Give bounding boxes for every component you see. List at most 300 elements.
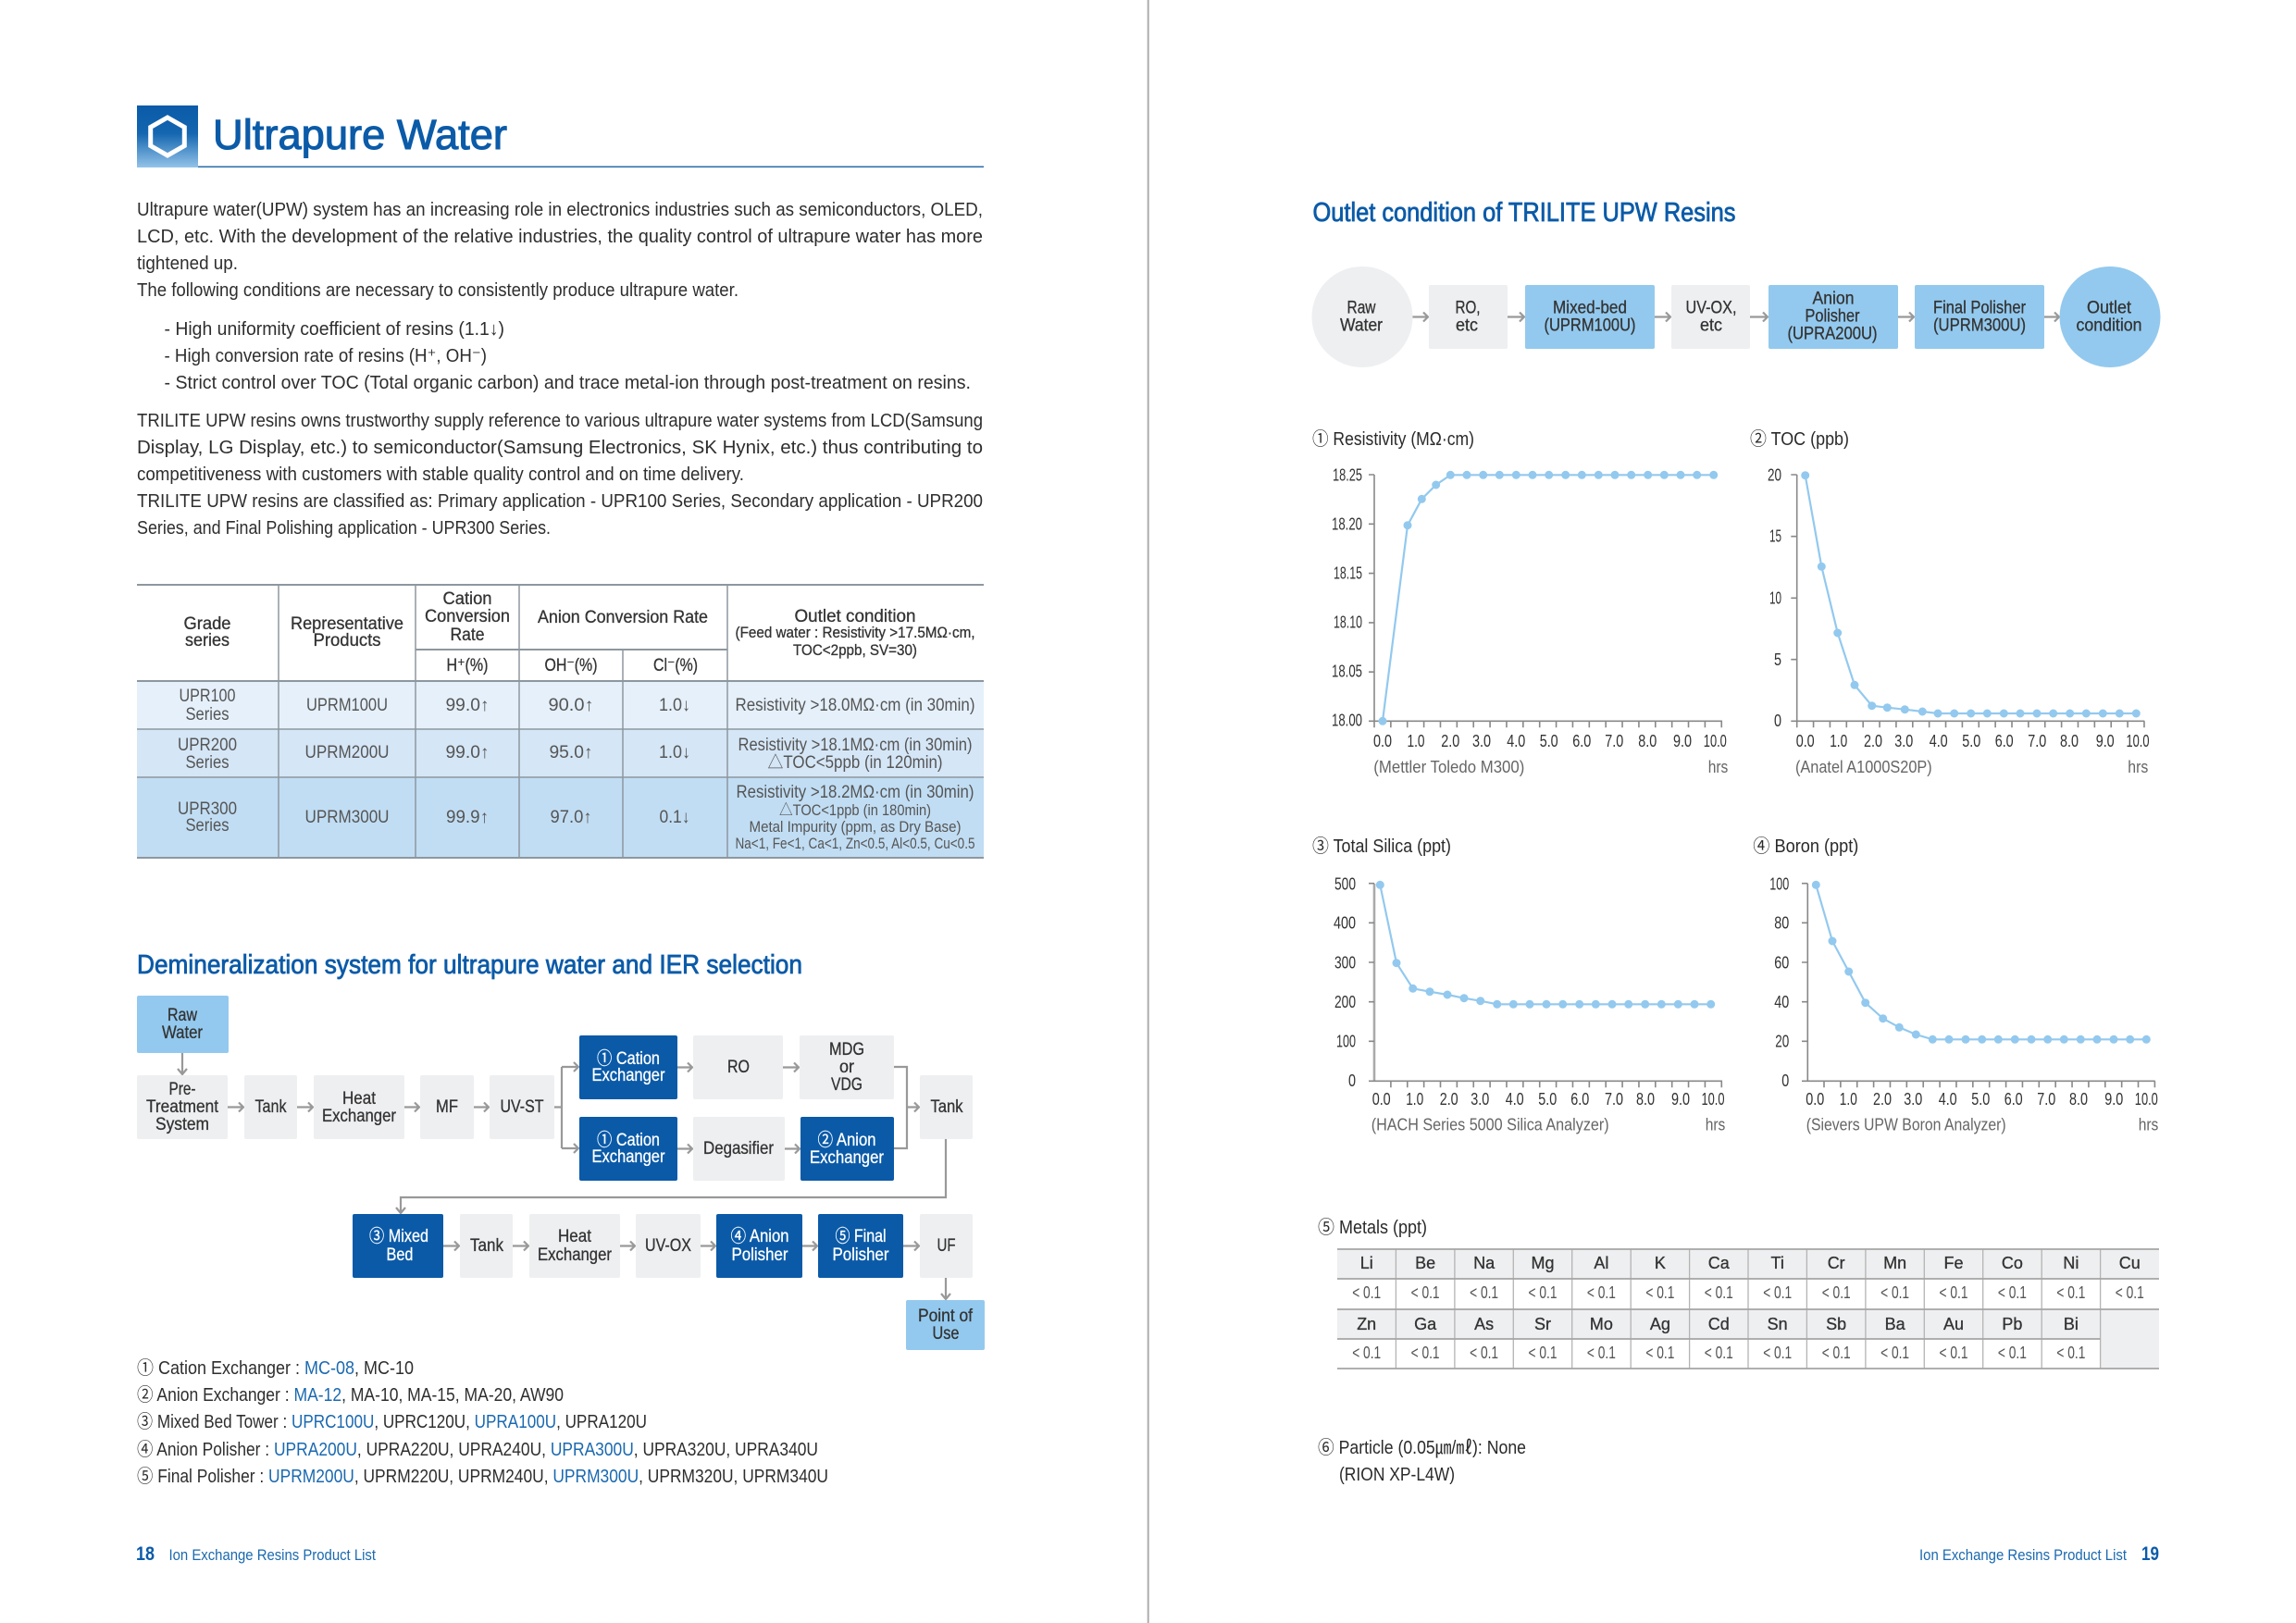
- node: final polisher: [1915, 285, 2044, 349]
- table row: UPR300: 0.1↓: [659, 808, 690, 827]
- x axis labels: [1373, 732, 1727, 750]
- x axis labels: 8.0: [1636, 1090, 1655, 1109]
- metals values 2: < 0.1: [1763, 1344, 1792, 1362]
- table header: Anion Conversion Rate: [538, 608, 708, 627]
- metals values 2: < 0.1: [1352, 1344, 1381, 1362]
- table row: UPR200: 95.0↑: [550, 743, 592, 762]
- box: anion exchanger: [800, 1117, 894, 1181]
- node: UV-OX etc: UV-OX,: [1686, 298, 1736, 318]
- metals values 1: < 0.1: [1940, 1283, 1967, 1302]
- metals values 2: < 0.1: [1529, 1344, 1557, 1362]
- text block: TRILITE description: Display, LG Display, etc.) to semiconductor(Samsung Electronics, SK Hynix, etc.) thus contributing to: [137, 438, 983, 458]
- y axis labels: [1768, 465, 1781, 730]
- x axis labels: 10.0: [1701, 1090, 1725, 1109]
- box: tank: [244, 1075, 297, 1139]
- y axis labels: 18.20: [1332, 515, 1362, 534]
- footer: right page: Ion Exchange Resins Product List: [1919, 1546, 2127, 1564]
- text block: introduction: tightened up.: [137, 254, 238, 274]
- instrument note: (Sievers UPW Boron Analyzer): [1806, 1116, 2006, 1134]
- box: MF: MF: [436, 1097, 458, 1117]
- legend: resin selection: ③ Mixed Bed Tower : UPRC100U, UPRC120U, UPRA100U, UPRA120U: [137, 1411, 647, 1432]
- metals values 2: < 0.1: [2056, 1344, 2085, 1362]
- box: mixed bed: Bed: [387, 1245, 413, 1265]
- node: anion polisher: (UPRA200U): [1788, 324, 1877, 344]
- metals values 1: < 0.1: [1763, 1283, 1792, 1302]
- unit: hrs: [2128, 758, 2148, 776]
- chart: total silica: [1312, 836, 1725, 1134]
- y axis labels: 500: [1334, 875, 1356, 894]
- metals row 1: Mg: [1531, 1254, 1555, 1272]
- metals values 2: < 0.1: [1705, 1344, 1733, 1362]
- box: heat exchanger row 3: Heat: [558, 1227, 592, 1246]
- flow diagram: demineralization system: [137, 996, 985, 1350]
- metals row 1: Li: [1360, 1254, 1373, 1272]
- box: MF: [420, 1075, 474, 1139]
- y axis labels: 18.00: [1332, 711, 1362, 729]
- box: tank right: Tank: [931, 1097, 963, 1117]
- x axis labels: 7.0: [2028, 732, 2046, 750]
- x axis labels: 0.0: [1806, 1090, 1824, 1109]
- node: RO etc: [1429, 285, 1508, 349]
- node: UV-OX etc: etc: [1700, 316, 1722, 335]
- x axis labels: 10.0: [2127, 732, 2149, 750]
- y axis labels: 5: [1774, 650, 1781, 669]
- metals row 2: [1357, 1315, 2079, 1333]
- chart title: ③ Total Silica (ppt): [1312, 836, 1451, 857]
- metals values 1: < 0.1: [1822, 1283, 1851, 1302]
- table row: UPR300: 99.9↑: [446, 808, 489, 827]
- box: mixed bed: [353, 1214, 443, 1278]
- footer: right page: 19: [2141, 1543, 2159, 1565]
- node: raw water: [1312, 266, 1412, 367]
- table row: UPR300: △TOC<1ppb (in 180min): [779, 801, 931, 819]
- metals row 1: Fe: [1943, 1254, 1964, 1272]
- text block: TRILITE description: TRILITE UPW resins are classified as: Primary application - UPR100 Series, Secondary application - UPR200: [137, 491, 983, 512]
- box: heat exchanger row 3: Exchanger: [538, 1245, 613, 1265]
- chart: boron: [1753, 836, 2158, 1134]
- box: anion polisher: ④ Anion: [731, 1226, 788, 1246]
- table row: UPR100: UPRM100U: [306, 696, 388, 715]
- metals row 2: Mo: [1590, 1315, 1613, 1333]
- box: point of use: Point of: [918, 1307, 974, 1326]
- table row: UPR300: [178, 783, 975, 852]
- y axis labels: 300: [1334, 954, 1356, 973]
- table header: (Feed water : Resistivity >17.5MΩ·cm,: [735, 624, 975, 641]
- data series: [1380, 885, 1711, 1004]
- unit: hrs: [2139, 1116, 2158, 1134]
- box: degasifier: Degasifier: [703, 1139, 775, 1158]
- table row: UPR300: Na<1, Fe<1, Ca<1, Zn<0.5, Al<0.5, Cu<0.5: [735, 835, 975, 852]
- table header: Conversion: [425, 607, 510, 626]
- node: anion polisher: Anion: [1812, 289, 1855, 309]
- table header: H⁺(%): [446, 656, 489, 675]
- text block: particle: (RION XP-L4W): [1339, 1465, 1455, 1485]
- table row: UPR300: UPR300: [178, 799, 237, 819]
- table header: Rate: [450, 626, 485, 645]
- chart title: ① Resistivity (MΩ·cm): [1312, 428, 1474, 450]
- x axis labels: 5.0: [1540, 732, 1558, 750]
- box: anion polisher: Polisher: [731, 1245, 788, 1265]
- metals row 1: Mn: [1883, 1254, 1906, 1272]
- table header: Grade: [183, 614, 231, 634]
- text block: introduction: The following conditions are necessary to consistently produce ultrapure water.: [137, 280, 738, 301]
- legend: resin selection: [137, 1357, 828, 1487]
- y axis labels: [1334, 875, 1356, 1090]
- box: pre-treatment system: System: [155, 1115, 209, 1134]
- data series: [1806, 476, 2136, 713]
- metals row 1: K: [1655, 1254, 1666, 1272]
- box: cation exchanger upper: ① Cation: [597, 1048, 660, 1069]
- box: cation exchanger upper: Exchanger: [592, 1066, 665, 1085]
- heading: demineralization: Demineralization system for ultrapure water and IER selection: [137, 950, 802, 980]
- unit: hrs: [1706, 1116, 1725, 1134]
- x axis labels: 1.0: [1830, 732, 1847, 750]
- box: anion polisher: [716, 1214, 802, 1278]
- x axis labels: 8.0: [2060, 732, 2079, 750]
- metals values 2: < 0.1: [1880, 1344, 1909, 1362]
- table header: Representative: [291, 614, 403, 634]
- box: final polisher: ⑤ Final: [835, 1226, 887, 1246]
- metals row 1: Ca: [1708, 1254, 1731, 1272]
- node: final polisher: (UPRM300U): [1933, 316, 2026, 335]
- x axis labels: 8.0: [2069, 1090, 2088, 1109]
- box: mixed bed: ③ Mixed: [369, 1226, 428, 1246]
- x axis labels: 7.0: [1605, 732, 1623, 750]
- box: MDG or VDG: MDG: [829, 1040, 864, 1059]
- title: Ultrapure Water: [213, 111, 507, 158]
- table row: UPR200: △TOC<5ppb (in 120min): [768, 752, 942, 773]
- instrument note: (HACH Series 5000 Silica Analyzer): [1371, 1116, 1609, 1134]
- metals row 1: Na: [1473, 1254, 1496, 1272]
- y axis labels: 18.05: [1332, 663, 1362, 681]
- box: final polisher: Polisher: [833, 1245, 889, 1265]
- x axis labels: 3.0: [1472, 732, 1491, 750]
- y axis labels: 20: [1768, 465, 1781, 484]
- node: mixed-bed: (UPRM100U): [1544, 316, 1636, 335]
- box: UF: [920, 1214, 973, 1278]
- metals values 2: < 0.1: [1645, 1344, 1674, 1362]
- text block: conditions list: - High conversion rate of resins (H⁺, OH⁻): [165, 346, 487, 366]
- footer: left page: Ion Exchange Resins Product List: [168, 1546, 376, 1564]
- metals values 2: < 0.1: [1822, 1344, 1851, 1362]
- text block: particle: ⑥ Particle (0.05㎛/㎖): None: [1318, 1437, 1526, 1458]
- box: heat exchanger: Exchanger: [322, 1107, 397, 1126]
- text block: TRILITE description: Series, and Final Polishing application - UPR300 Series.: [137, 518, 551, 539]
- x axis labels: 6.0: [2004, 1090, 2023, 1109]
- metals values 2: [1352, 1344, 2085, 1362]
- x axis labels: 4.0: [1939, 1090, 1957, 1109]
- metals row 2: Zn: [1357, 1315, 1376, 1333]
- metals values 1: < 0.1: [1470, 1283, 1498, 1302]
- metals row 2: Ag: [1650, 1315, 1670, 1333]
- table header: Outlet condition: [794, 607, 916, 626]
- box: tank row 3: [460, 1214, 513, 1278]
- table row: UPR200: UPRM200U: [305, 743, 389, 762]
- metals row 2: Sn: [1768, 1315, 1788, 1333]
- box: point of use: Use: [933, 1324, 959, 1344]
- text block: introduction: [137, 200, 983, 301]
- metals row 1: Co: [2002, 1254, 2023, 1272]
- table: grade series: [137, 585, 984, 858]
- y axis labels: 0: [1781, 1072, 1789, 1090]
- box: degasifier: [693, 1117, 785, 1181]
- table header: OH⁻(%): [544, 656, 598, 675]
- box: anion exchanger: Exchanger: [810, 1148, 885, 1168]
- table row: UPR100: [180, 687, 975, 725]
- box: UV-ST: UV-ST: [500, 1097, 544, 1117]
- text block: conditions list: - Strict control over TOC (Total organic carbon) and trace metal-ion through post-treatment on resins.: [165, 373, 971, 393]
- x axis labels: 10.0: [2135, 1090, 2158, 1109]
- table row: UPR100: UPR100: [180, 687, 235, 706]
- x axis labels: 1.0: [1406, 1090, 1423, 1109]
- metals row 1: Al: [1594, 1254, 1608, 1272]
- x axis labels: 9.0: [2104, 1090, 2123, 1109]
- x axis labels: 1.0: [1407, 732, 1425, 750]
- box: anion exchanger: ② Anion: [818, 1130, 875, 1150]
- metals row 1: [1360, 1254, 2141, 1272]
- box: tank right: [920, 1075, 973, 1139]
- box: RO: RO: [727, 1058, 750, 1077]
- x axis labels: 9.0: [1671, 1090, 1690, 1109]
- y axis labels: [1769, 875, 1789, 1090]
- unit: hrs: [1708, 758, 1728, 776]
- footer: left page: 18: [136, 1543, 155, 1565]
- x axis labels: 3.0: [1894, 732, 1913, 750]
- box: cation exchanger lower: Exchanger: [592, 1147, 665, 1167]
- x axis labels: 6.0: [1572, 732, 1591, 750]
- x axis labels: 4.0: [1506, 1090, 1524, 1109]
- box: MDG or VDG: [800, 1035, 894, 1099]
- y axis labels: 40: [1774, 993, 1789, 1011]
- table row: UPR300: Series: [185, 816, 230, 836]
- text block: TRILITE description: competitiveness with customers with stable quality control and on time delivery.: [137, 465, 744, 485]
- metals values 2: < 0.1: [1470, 1344, 1498, 1362]
- data series: [1383, 475, 1714, 721]
- table row: UPR200: Resistivity >18.1MΩ·cm (in 30min): [738, 736, 972, 755]
- legend: resin selection: ② Anion Exchanger : MA-12, MA-10, MA-15, MA-20, AW90: [137, 1384, 564, 1406]
- metals row 2: Ga: [1414, 1315, 1437, 1333]
- x axis labels: 7.0: [2037, 1090, 2055, 1109]
- box: cation exchanger lower: [579, 1117, 677, 1181]
- box: cation exchanger lower: ① Cation: [597, 1130, 660, 1150]
- table row: UPR100: Series: [185, 705, 230, 725]
- heading: metals: ⑤ Metals (ppt): [1318, 1217, 1427, 1238]
- y axis labels: 100: [1769, 875, 1789, 894]
- metals row 2: Au: [1943, 1315, 1964, 1333]
- node: UV-OX etc: [1671, 285, 1750, 349]
- text block: introduction: Ultrapure water(UPW) system has an increasing role in electronics industries such as semiconductors, OLED,: [137, 200, 983, 220]
- y axis labels: 100: [1336, 1033, 1356, 1051]
- box: UV-OX: UV-OX: [645, 1236, 691, 1256]
- x axis labels: [1806, 1090, 2158, 1109]
- node: RO etc: RO,: [1455, 298, 1481, 318]
- y axis labels: 200: [1334, 993, 1356, 1011]
- y axis labels: 60: [1774, 954, 1789, 973]
- box: RO: [693, 1035, 783, 1099]
- box: heat exchanger: [314, 1075, 404, 1139]
- box: pre-treatment system: [137, 1075, 228, 1139]
- table row: UPR100: 1.0↓: [659, 696, 690, 715]
- metals row 1: Cr: [1828, 1254, 1845, 1272]
- y axis labels: 10: [1769, 588, 1781, 607]
- y axis labels: 80: [1774, 913, 1789, 932]
- table header: TOC<2ppb, SV=30): [793, 641, 917, 659]
- metals row 2: Sb: [1826, 1315, 1846, 1333]
- node: outlet condition: Outlet: [2087, 298, 2132, 318]
- box: MDG or VDG: VDG: [831, 1075, 863, 1095]
- y axis labels: 20: [1775, 1033, 1789, 1051]
- metals values 1: < 0.1: [2056, 1283, 2085, 1302]
- text block: conditions list: [165, 319, 971, 393]
- x axis labels: 0.0: [1796, 732, 1815, 750]
- table row: UPR300: Resistivity >18.2MΩ·cm (in 30min): [737, 783, 974, 802]
- x axis labels: 0.0: [1372, 1090, 1391, 1109]
- x axis labels: 6.0: [1570, 1090, 1589, 1109]
- box: UV-OX: [636, 1214, 701, 1278]
- box: tank row 3: Tank: [470, 1236, 503, 1256]
- node: mixed-bed: Mixed-bed: [1553, 298, 1627, 318]
- y axis labels: 0: [1774, 712, 1781, 730]
- table header: series: [185, 631, 230, 650]
- table row: UPR300: 97.0↑: [550, 808, 592, 827]
- y axis labels: 18.15: [1334, 564, 1362, 583]
- x axis labels: 7.0: [1605, 1090, 1623, 1109]
- metals values 1: < 0.1: [1645, 1283, 1674, 1302]
- x axis labels: 9.0: [1673, 732, 1692, 750]
- table row: UPR200: UPR200: [178, 736, 237, 755]
- table row: UPR200: Series: [185, 753, 230, 773]
- chart: TOC: [1750, 428, 2149, 776]
- x axis labels: 1.0: [1840, 1090, 1857, 1109]
- x axis labels: 8.0: [1638, 732, 1657, 750]
- heading: outlet condition: Outlet condition of TRILITE UPW Resins: [1312, 198, 1736, 228]
- x axis labels: 9.0: [2096, 732, 2115, 750]
- legend: resin selection: ① Cation Exchanger : MC-08, MC-10: [137, 1357, 414, 1379]
- table row: UPR300: UPRM300U: [305, 808, 389, 827]
- metals row 1: Ti: [1771, 1254, 1784, 1272]
- metals values 1: < 0.1: [1587, 1283, 1616, 1302]
- instrument note: (Anatel A1000S20P): [1795, 758, 1932, 776]
- metals values 2: < 0.1: [1411, 1344, 1440, 1362]
- node: anion polisher: [1769, 285, 1898, 349]
- node: RO etc: etc: [1456, 316, 1478, 335]
- arrows: process connections: [178, 1053, 950, 1299]
- node: outlet condition: [2060, 266, 2160, 367]
- metals values 2: < 0.1: [1940, 1344, 1967, 1362]
- box: pre-treatment system: Treatment: [146, 1097, 219, 1117]
- table row: UPR200: 1.0↓: [659, 743, 690, 762]
- text block: conditions list: - High uniformity coefficient of resins (1.1↓): [165, 319, 504, 340]
- box: raw water: [137, 996, 229, 1053]
- panel: left page header: [137, 105, 984, 167]
- icon: hexagon: [137, 105, 198, 167]
- y axis labels: 18.10: [1334, 613, 1362, 631]
- box: UV-ST: [490, 1075, 554, 1139]
- box: cation exchanger upper: [579, 1035, 677, 1099]
- x axis labels: 0.0: [1373, 732, 1392, 750]
- table row: UPR200: 99.0↑: [446, 743, 489, 762]
- x axis labels: 3.0: [1471, 1090, 1489, 1109]
- chart title: ④ Boron (ppt): [1753, 836, 1858, 857]
- text block: particle: [1318, 1437, 1526, 1485]
- metals values 2: < 0.1: [1998, 1344, 2027, 1362]
- table row: UPR100: Resistivity >18.0MΩ·cm (in 30min): [735, 696, 975, 715]
- y axis labels: 400: [1334, 913, 1356, 932]
- x axis labels: [1796, 732, 2149, 750]
- metals values 1: < 0.1: [2116, 1283, 2144, 1302]
- box: UF: UF: [937, 1236, 955, 1256]
- node: final polisher: Final Polisher: [1933, 298, 2027, 318]
- data series: [1816, 885, 2146, 1039]
- footer: left page: [136, 1543, 376, 1565]
- metals row 2: Pb: [2002, 1315, 2022, 1333]
- metals row 2: Cd: [1708, 1315, 1730, 1333]
- x axis labels: 2.0: [1440, 1090, 1458, 1109]
- node: anion polisher: Polisher: [1805, 307, 1860, 326]
- x axis labels: 3.0: [1904, 1090, 1922, 1109]
- metals row 1: Ni: [2063, 1254, 2079, 1272]
- metals row 1: Cu: [2119, 1254, 2141, 1272]
- box: pre-treatment system: Pre-: [168, 1080, 196, 1099]
- x axis labels: 5.0: [1538, 1090, 1557, 1109]
- metals values 1: < 0.1: [1411, 1283, 1440, 1302]
- table header: Cl⁻(%): [653, 656, 698, 675]
- metals values 2: < 0.1: [1587, 1344, 1616, 1362]
- x axis labels: 10.0: [1704, 732, 1727, 750]
- chart: resistivity: [1312, 428, 1728, 776]
- box: raw water: Water: [162, 1023, 204, 1043]
- box: MDG or VDG: or: [839, 1058, 855, 1077]
- metals values 1: < 0.1: [1529, 1283, 1557, 1302]
- table row: UPR100: 99.0↑: [446, 696, 489, 715]
- node: outlet condition: condition: [2077, 316, 2141, 335]
- y axis labels: 18.25: [1333, 465, 1362, 484]
- x axis labels: 2.0: [1864, 732, 1882, 750]
- node: mixed-bed: [1525, 285, 1655, 349]
- instrument note: (Mettler Toledo M300): [1373, 758, 1524, 776]
- x axis labels: 4.0: [1930, 732, 1948, 750]
- metals row 2: Ba: [1885, 1315, 1906, 1333]
- y axis labels: 15: [1769, 527, 1781, 546]
- x axis labels: 5.0: [1962, 732, 1980, 750]
- metals row 2: Bi: [2064, 1315, 2079, 1333]
- y axis labels: 0: [1348, 1072, 1356, 1090]
- text block: TRILITE description: TRILITE UPW resins owns trustworthy supply reference to various ultrapure water systems from LCD(Samsung: [137, 411, 983, 431]
- table: metals: [1337, 1249, 2159, 1369]
- table row: UPR200: [178, 736, 972, 773]
- box: raw water: Raw: [168, 1006, 197, 1025]
- table row: UPR300: Metal Impurity (ppm, as Dry Base): [750, 818, 961, 836]
- metals values 1: [1352, 1283, 2144, 1302]
- box: tank: Tank: [255, 1097, 287, 1117]
- table header: Products: [313, 631, 381, 650]
- x axis labels: 6.0: [1995, 732, 2014, 750]
- node: raw water: Water: [1340, 316, 1384, 335]
- legend: resin selection: ⑤ Final Polisher : UPRM200U, UPRM220U, UPRM240U, UPRM300U, UPRM320U, UPRM340U: [137, 1466, 828, 1487]
- x axis labels: 4.0: [1507, 732, 1525, 750]
- metals values 1: < 0.1: [1352, 1283, 1381, 1302]
- box: heat exchanger row 3: [529, 1214, 620, 1278]
- table header: [183, 589, 975, 675]
- text block: TRILITE description: [137, 411, 983, 539]
- metals values 1: < 0.1: [1880, 1283, 1909, 1302]
- text block: introduction: LCD, etc. With the development of the relative industries, the quality control of ultrapure water has more: [137, 227, 983, 247]
- x axis labels: 2.0: [1441, 732, 1459, 750]
- box: heat exchanger: Heat: [342, 1089, 377, 1109]
- box: point of use: [906, 1300, 985, 1350]
- x axis labels: 5.0: [1971, 1090, 1990, 1109]
- x axis labels: [1372, 1090, 1725, 1109]
